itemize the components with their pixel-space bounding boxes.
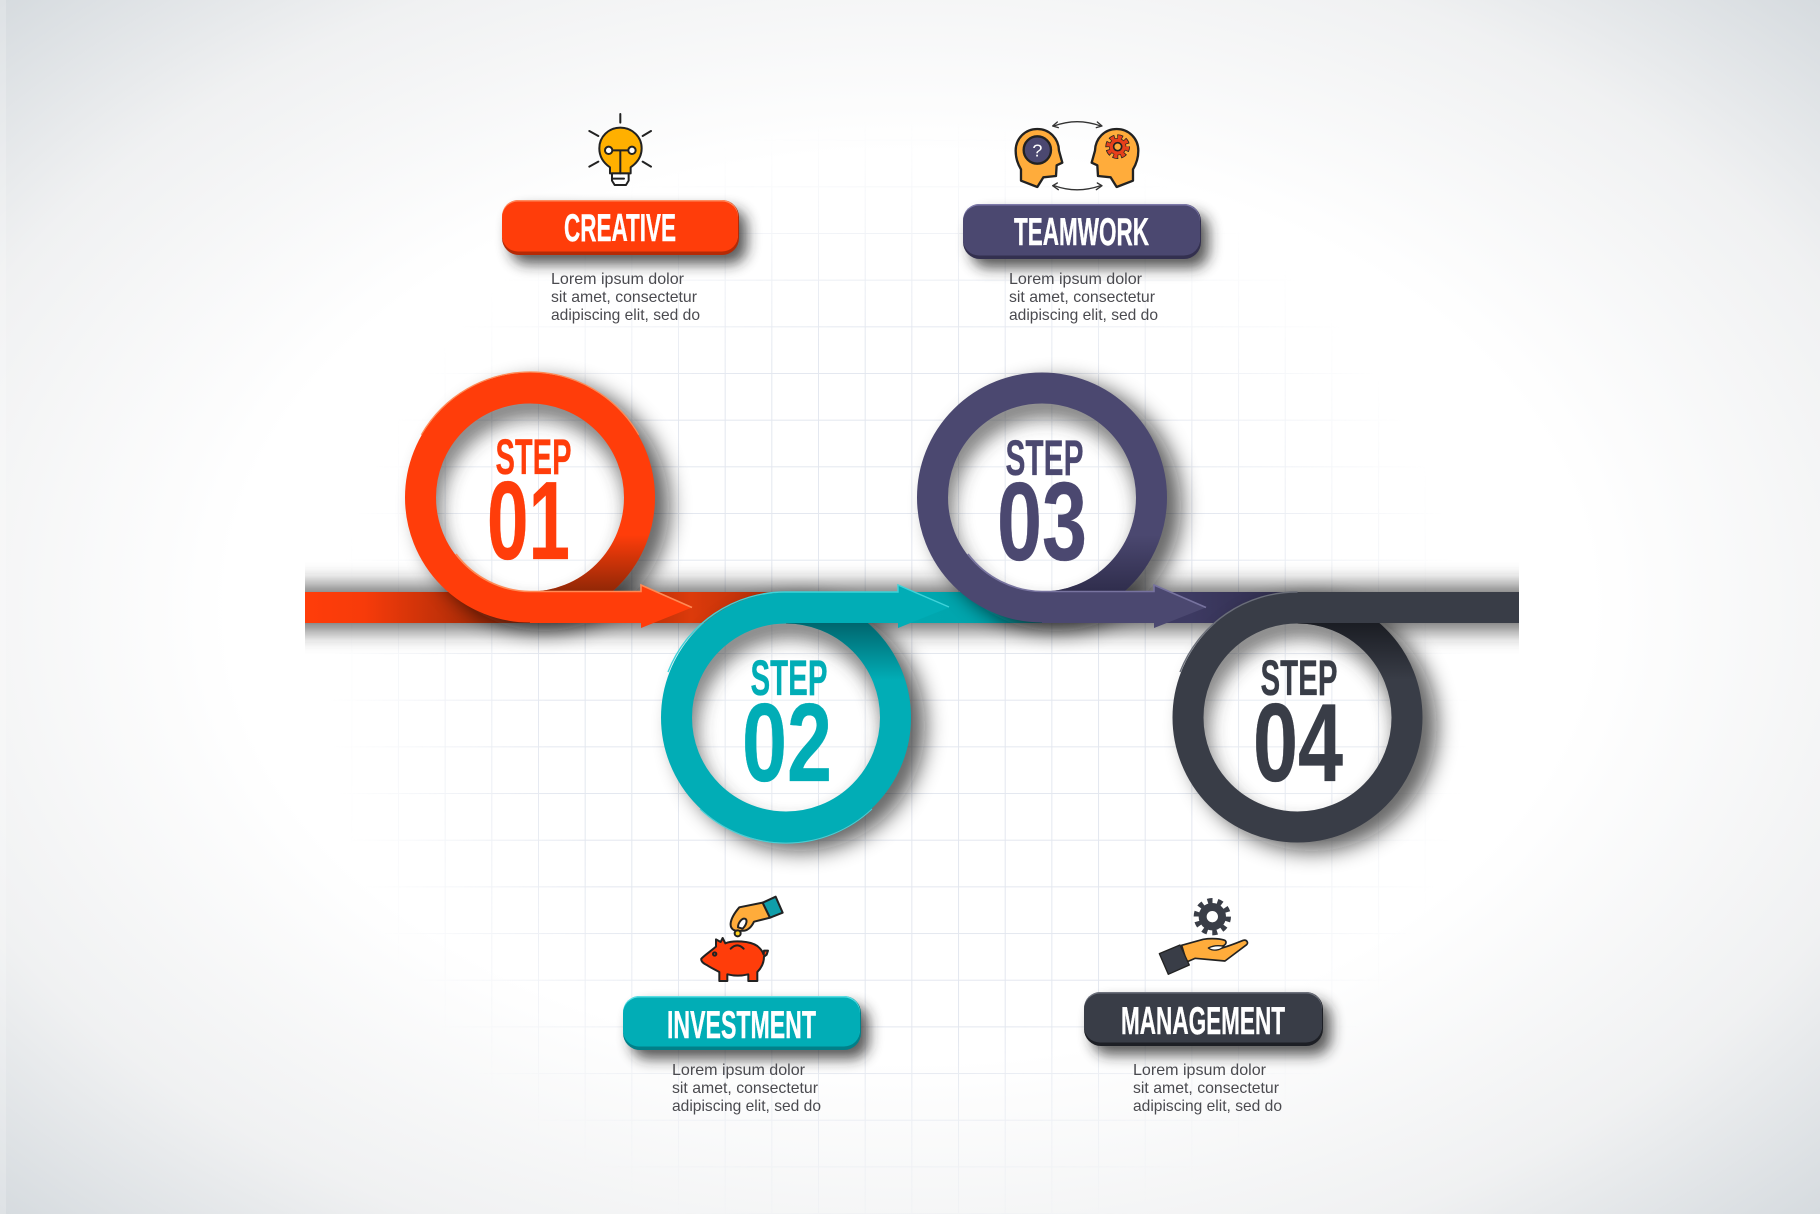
text: investment description — [672, 1062, 821, 1115]
text: creative description — [551, 271, 700, 324]
text: management description — [1133, 1062, 1282, 1115]
heading: management: MANAGEMENT — [1121, 1000, 1285, 1043]
icon: piggy bank and coin — [701, 897, 783, 981]
step 02 ring and arrow — [668, 585, 949, 843]
heading: investment: INVESTMENT — [667, 1004, 816, 1047]
step 01 ring and arrow — [420, 372, 692, 628]
text: creative description: adipiscing elit, sed do — [551, 307, 700, 324]
step 03 label — [997, 430, 1087, 584]
text: management description: adipiscing elit, sed do — [1133, 1098, 1282, 1115]
text: investment description: Lorem ipsum dolor — [672, 1062, 806, 1079]
panel: teamwork — [963, 204, 1209, 268]
text: teamwork description: Lorem ipsum dolor — [1009, 271, 1143, 288]
step 03 label: 03 — [997, 460, 1087, 584]
step 02 label — [742, 650, 832, 805]
text: investment description: sit amet, consectetur — [672, 1080, 819, 1097]
panel: management — [1084, 992, 1331, 1055]
step 01 label: 01 — [487, 459, 570, 583]
step 02 label: 02 — [742, 681, 832, 805]
icon: two heads exchanging ideas — [1016, 122, 1138, 190]
icon: two heads exchanging ideas: ? — [1032, 140, 1042, 160]
teal band segment — [898, 592, 1060, 623]
text: teamwork description: sit amet, consectetur — [1009, 289, 1156, 306]
heading: creative: CREATIVE — [564, 207, 676, 250]
text: creative description: Lorem ipsum dolor — [551, 271, 685, 288]
step 04 label: STEP — [1260, 650, 1338, 706]
step 02 label: STEP — [750, 650, 828, 706]
text: teamwork description — [1009, 271, 1158, 324]
icon: light bulb — [589, 114, 651, 185]
panel: investment — [623, 996, 869, 1059]
text: management description: sit amet, consectetur — [1133, 1080, 1280, 1097]
text: management description: Lorem ipsum dolor — [1133, 1062, 1267, 1079]
text: investment description: adipiscing elit, sed do — [672, 1098, 821, 1115]
icon: hand holding gear — [1159, 901, 1247, 974]
step 03 ring and arrow — [932, 388, 1206, 628]
text: creative description: sit amet, consectetur — [551, 289, 698, 306]
panel: creative — [502, 200, 747, 264]
heading: teamwork: TEAMWORK — [1014, 211, 1149, 254]
step 03 label: STEP — [1006, 430, 1084, 486]
step 04 label: 04 — [1253, 681, 1343, 805]
step 01 label — [487, 429, 572, 583]
step 04 label — [1253, 650, 1343, 805]
red band segment — [305, 592, 805, 623]
step 04 ring and band end — [1180, 592, 1519, 837]
horizontal timeline band shadow — [280, 586, 1550, 630]
purple band segment — [1154, 592, 1320, 623]
text: teamwork description: adipiscing elit, sed do — [1009, 307, 1158, 324]
step 01 label: STEP — [496, 429, 572, 485]
